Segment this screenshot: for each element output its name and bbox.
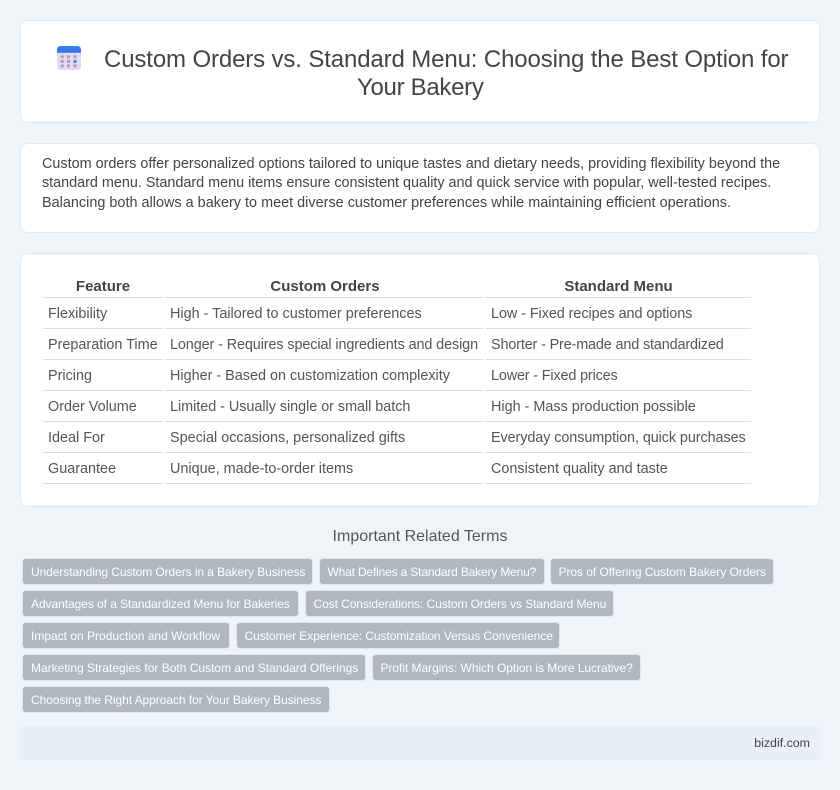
panel: header (20, 20, 820, 123)
footer source: bizdif.com (754, 736, 810, 750)
tag (23, 623, 229, 648)
tag (23, 687, 329, 712)
row: flexibility: Low - Fixed recipes and options (491, 306, 692, 322)
tag: Marketing Strategies for Both Custom and Standard Offerings (31, 661, 358, 675)
title: Custom Orders vs. Standard Menu: Choosing the Best Option for (104, 46, 788, 73)
table header: Standard Menu (564, 278, 673, 295)
tag (23, 591, 298, 616)
row: ideal for: Everyday consumption, quick purchases (491, 430, 746, 446)
tag: Understanding Custom Orders in a Bakery Business (31, 565, 305, 579)
row: order volume: Limited - Usually single or small batch (170, 399, 410, 415)
footer (20, 726, 820, 760)
panel: intro (20, 143, 820, 233)
intro text: Balancing both allows a bakery to meet diverse customer preferences while maintaining efficient operations. (42, 195, 731, 211)
panel: comparison table (20, 253, 820, 507)
tag (372, 655, 640, 680)
row: guarantee: Consistent quality and taste (491, 461, 668, 477)
row: flexibility: Flexibility (48, 306, 107, 322)
tag (23, 559, 312, 584)
row: ideal for: Ideal For (48, 430, 105, 446)
row: order volume: Order Volume (48, 399, 137, 415)
row: guarantee: Unique, made-to-order items (170, 461, 353, 477)
tag (236, 623, 559, 648)
row: preparation time (48, 337, 724, 353)
tag: Advantages of a Standardized Menu for Bakeries (31, 597, 290, 611)
icon: calendar (57, 46, 81, 70)
row: flexibility: High - Tailored to customer preferences (170, 306, 422, 322)
tag (306, 591, 613, 616)
row: preparation time: Preparation Time (48, 337, 158, 353)
comparison table (43, 278, 751, 484)
row: order volume: High - Mass production possible (491, 399, 696, 415)
row: preparation time: Longer - Requires special ingredients and design (170, 337, 478, 353)
tag: What Defines a Standard Bakery Menu? (328, 565, 536, 579)
intro text: Custom orders offer personalized options tailored to unique tastes and dietary needs, providing flexibility beyond the (42, 156, 780, 172)
tag: Pros of Offering Custom Bakery Orders (558, 565, 766, 579)
tag (23, 655, 365, 680)
tag (320, 559, 544, 584)
row: flexibility (48, 306, 692, 322)
row: ideal for (48, 430, 746, 446)
row: pricing: Pricing (48, 368, 92, 384)
row: guarantee: Guarantee (48, 461, 116, 477)
intro text (42, 156, 780, 211)
table header (76, 278, 673, 295)
title (104, 46, 788, 101)
title: Your Bakery (357, 74, 484, 101)
tag: Choosing the Right Approach for Your Bakery Business (31, 693, 321, 707)
row: pricing (48, 368, 618, 384)
tag: Impact on Production and Workflow (31, 629, 220, 643)
row: preparation time: Shorter - Pre-made and standardized (491, 337, 724, 353)
row: guarantee (48, 461, 668, 477)
tag: Cost Considerations: Custom Orders vs Standard Menu (314, 597, 606, 611)
row: pricing: Higher - Based on customization complexity (170, 368, 450, 384)
related term tags (22, 558, 774, 713)
row: ideal for: Special occasions, personalized gifts (170, 430, 405, 446)
tag: Customer Experience: Customization Versus Convenience (244, 629, 553, 643)
intro text: standard menu. Standard menu items ensure consistent quality and quick service with popular, well-tested recipes. (42, 175, 771, 191)
table header: Feature (76, 278, 130, 295)
tag: Profit Margins: Which Option is More Lucrative? (380, 661, 633, 675)
row: order volume (48, 399, 696, 415)
heading: related terms: Important Related Terms (333, 528, 507, 545)
row: pricing: Lower - Fixed prices (491, 368, 618, 384)
tag (550, 559, 772, 584)
table header: Custom Orders (270, 278, 380, 295)
